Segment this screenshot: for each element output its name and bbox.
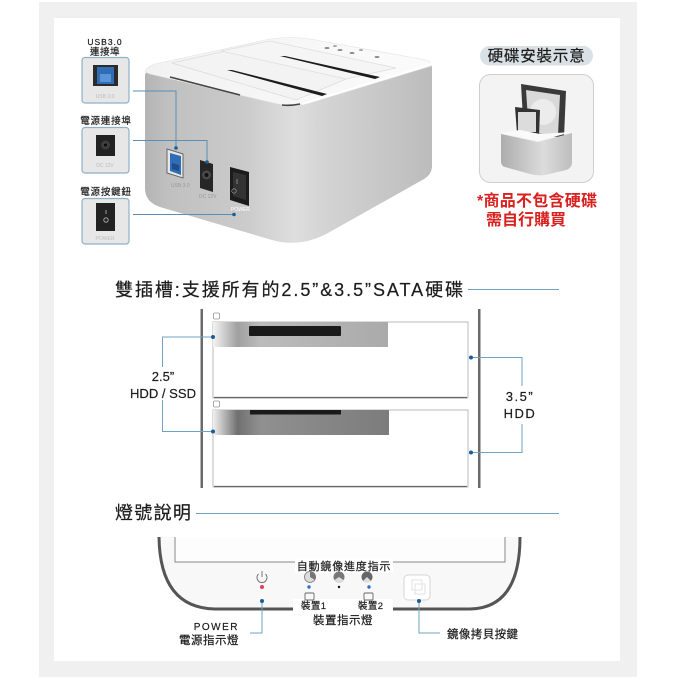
callout: 3.5 inch HDD [469, 356, 536, 454]
side rails [200, 309, 480, 488]
callout: mirror copy button [417, 599, 518, 641]
device icons [305, 593, 373, 600]
USB port [167, 149, 190, 189]
callout: mirror copy button: 鏡像拷貝按鍵 [447, 627, 518, 641]
slot 2 [221, 41, 396, 79]
label: 電源按鍵鈕 [80, 186, 132, 198]
power switch: POWER [231, 207, 250, 213]
slot 1 [172, 51, 346, 100]
thumbnail: switch [82, 198, 129, 244]
notice: drives not included: *商品不包含硬碟 [477, 191, 597, 210]
DC port [199, 160, 217, 200]
label: device 2: 裝置2 [358, 600, 383, 612]
callout: 2.5 inch HDD/SSD [130, 335, 215, 434]
white masks behind labels [293, 559, 393, 613]
3.5 inch drive [521, 84, 566, 137]
leader line [133, 213, 236, 216]
power switch [230, 167, 250, 213]
notice: drives not included [477, 191, 597, 229]
heading: LED description: 燈號說明 [115, 503, 192, 523]
label: auto mirror progress indicator: 自動鏡像進度指示 [297, 559, 391, 573]
recess outline [175, 537, 505, 562]
dock edge highlight [170, 77, 300, 105]
dock top face [145, 38, 431, 105]
label: connection port: 連接埠 [90, 46, 120, 58]
diagram: dual slot top view [200, 309, 480, 488]
panel: drive installation illustration [480, 46, 594, 182]
label: USB3.0: USB3.0 [87, 37, 123, 47]
callout: USB3.0 port [82, 37, 178, 150]
thumbnail: switch: POWER [96, 236, 115, 242]
callout: power port [80, 115, 209, 173]
thumbnail: USB port: USB 3.0 [96, 94, 115, 100]
callout: power indicator: POWER [194, 622, 239, 633]
panel body [159, 537, 520, 609]
callout: 2.5 inch HDD/SSD: HDD / SSD [130, 386, 196, 401]
top LEDs [324, 45, 380, 58]
callout: 3.5 inch HDD: HDD [504, 406, 536, 421]
label: 電源連接埠 [80, 115, 132, 127]
heading: dual slots: 雙插槽:支援所有的2.5”&3.5”SATA硬碟 [115, 280, 463, 300]
callout: power button [80, 186, 236, 244]
indicator dots [307, 585, 371, 589]
2.5 inch drive [515, 107, 540, 136]
leader line [133, 140, 209, 164]
callout: power indicator [179, 599, 264, 647]
slot 1 [213, 322, 468, 398]
callout: 3.5 inch HDD: 3.5” [506, 389, 534, 404]
dock body [145, 64, 432, 243]
slot 2 [213, 410, 468, 487]
leader line [133, 91, 178, 150]
USB port: USB 3.0 [171, 183, 190, 189]
label: device indicator: 裝置指示燈 [313, 613, 373, 627]
slot icons [214, 313, 220, 407]
label: device 1: 裝置1 [301, 600, 326, 612]
mirror copy button [404, 575, 430, 600]
callout: 2.5 inch HDD/SSD: 2.5” [152, 369, 174, 384]
mini dock [501, 130, 572, 175]
notice: drives not included: 需自行購買 [486, 210, 566, 229]
product photo: dock rear view [145, 38, 432, 243]
mirror progress icons [304, 571, 372, 583]
diagram: LED panel [159, 537, 520, 613]
DC port: DC 12V [199, 194, 217, 200]
pill heading: 硬碟安裝示意 [488, 46, 585, 65]
rounded image frame [480, 74, 594, 182]
thumbnail: DC port: DC 12V [96, 163, 114, 169]
callout: power indicator: 電源指示燈 [179, 633, 239, 647]
power icon [257, 571, 267, 589]
